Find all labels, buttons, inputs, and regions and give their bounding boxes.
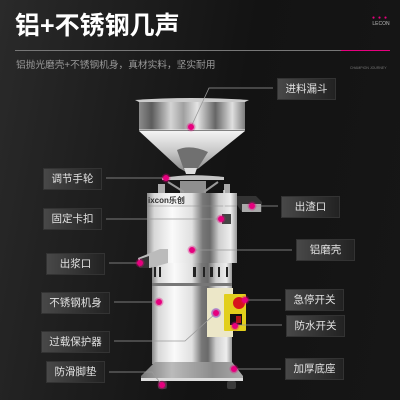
brand on shell: ixcon乐创 (148, 195, 185, 205)
label: overload protector: 过载保护器 (49, 336, 102, 348)
pink marker dots (137, 124, 255, 388)
control box (207, 288, 246, 337)
brand mark: LECON (372, 21, 390, 27)
label: feed funnel: 进料漏斗 (286, 83, 328, 95)
label: fixing clip: 固定卡扣 (52, 213, 94, 225)
label: anti-slip pad (46, 361, 105, 383)
label: stainless body: 不锈钢机身 (49, 297, 102, 309)
label: slurry outlet (46, 253, 105, 275)
grill ring (152, 263, 232, 286)
divider (15, 50, 390, 51)
base (141, 362, 243, 389)
label: feed funnel (277, 78, 336, 100)
label: emergency stop: 急停开关 (294, 294, 336, 306)
brand mark: ●●● (372, 15, 390, 21)
residue outlet (237, 196, 262, 212)
label: residue outlet: 出渣口 (295, 201, 326, 213)
label: anti-slip pad: 防滑脚垫 (54, 366, 96, 378)
subtitle: 铝抛光磨壳+不锈钢机身，真材实料，坚实耐用 (16, 60, 215, 71)
label: slurry outlet: 出浆口 (60, 258, 91, 270)
label: thick base: 加厚底座 (294, 363, 336, 375)
upper aluminium shell (147, 190, 237, 263)
stainless steel body (152, 286, 232, 364)
label: waterproof switch (286, 315, 345, 337)
label: residue outlet (281, 196, 340, 218)
label: emergency stop (285, 289, 344, 311)
label: overload protector (41, 331, 110, 353)
label: aluminium shell (296, 239, 355, 261)
label: fixing clip (43, 208, 102, 230)
title: 铝+不锈钢几声 (15, 12, 180, 40)
slurry outlet (138, 249, 168, 268)
leader lines (106, 88, 292, 385)
small caption: CHAMPION JOURNEY (350, 66, 387, 70)
brand mark (372, 15, 390, 27)
adjusting wheel and bracket (158, 175, 230, 193)
label: stainless body (41, 292, 110, 314)
funnel (135, 98, 249, 174)
label: adjusting wheel (43, 168, 102, 190)
label: thick base (285, 358, 344, 380)
label: adjusting wheel: 调节手轮 (52, 173, 94, 185)
label: aluminium shell: 铝磨壳 (310, 244, 341, 256)
label: waterproof switch: 防水开关 (294, 320, 336, 332)
